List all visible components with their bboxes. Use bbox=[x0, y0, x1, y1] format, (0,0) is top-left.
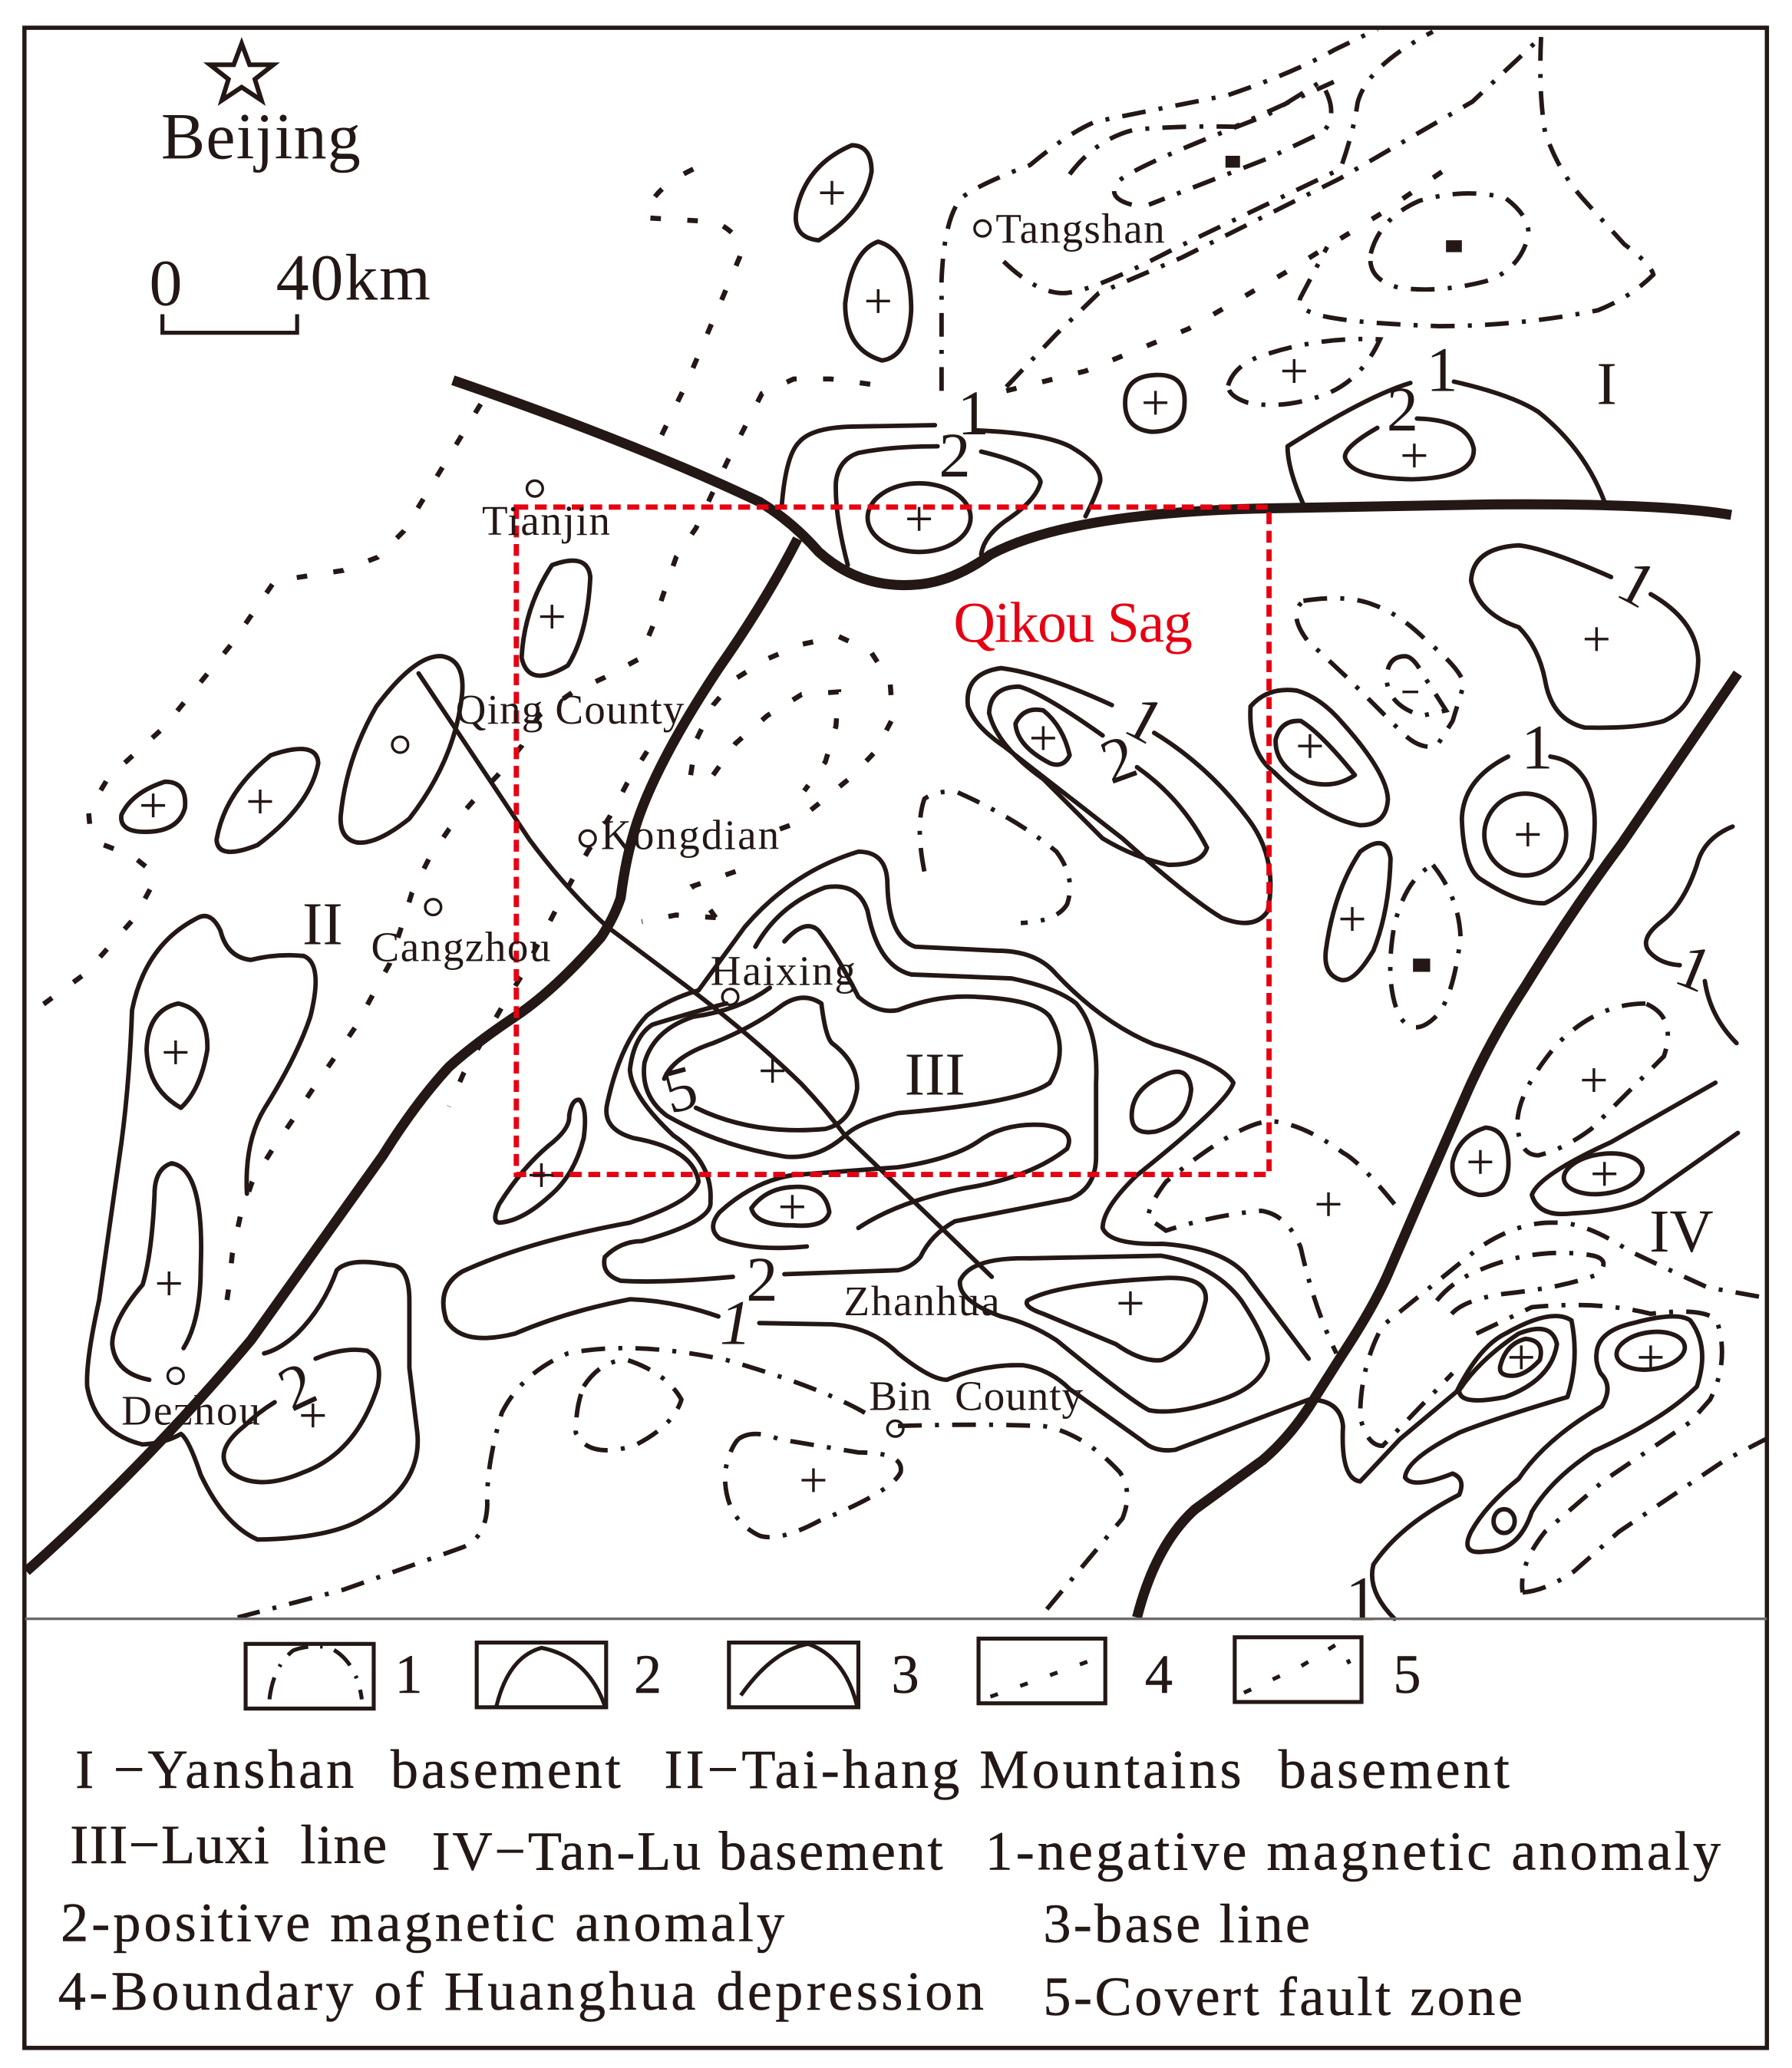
legend symbol 1: negative anomaly: 1 bbox=[394, 1644, 423, 1705]
legend symbol 3: base line bbox=[729, 1643, 919, 1707]
city labels: Tianjin bbox=[482, 497, 610, 544]
legend symbol 4: depression boundary: 4 bbox=[1145, 1644, 1173, 1705]
legend text lines: 5-Covert fault zone bbox=[1043, 1966, 1523, 2027]
city labels: Tangshan bbox=[995, 206, 1165, 252]
legend symbol 5: covert fault zone bbox=[1235, 1638, 1421, 1705]
contour value labels: 2 bbox=[268, 1347, 326, 1425]
contour value labels bbox=[268, 334, 1722, 1634]
anomaly markers: plus signs bbox=[141, 181, 1662, 1492]
contour value labels: 1 bbox=[1114, 681, 1176, 758]
anomaly markers: black squares and minus bbox=[1226, 156, 1462, 971]
legend text lines bbox=[58, 1739, 1721, 2027]
legend symbol 3: base line: 3 bbox=[891, 1644, 919, 1705]
scale bar: 0 bbox=[149, 246, 182, 319]
contour value labels: 1 bbox=[1345, 1563, 1378, 1634]
legend text lines: IV−Tan-Lu basement bbox=[432, 1821, 943, 1882]
legend text lines: I −Yanshan basement bbox=[75, 1739, 621, 1800]
legend symbol 4: depression boundary bbox=[979, 1638, 1173, 1705]
label: Qikou Sag: Qikou Sag bbox=[953, 591, 1193, 655]
label: Beijing: Beijing bbox=[161, 99, 361, 173]
legend text lines: 2-positive magnetic anomaly bbox=[61, 1892, 784, 1953]
panel: map bbox=[26, 29, 1766, 1634]
city labels bbox=[121, 206, 1165, 1434]
basement numerals: I bbox=[1596, 351, 1617, 418]
contour value labels: 1 bbox=[1521, 711, 1553, 782]
contour value labels: 2 bbox=[1387, 374, 1418, 444]
basement numerals bbox=[302, 351, 1714, 1265]
contour value labels: 1 bbox=[958, 378, 989, 448]
magnetic anomaly contours (solid lines) bbox=[87, 145, 1738, 1619]
contour value labels: 1 bbox=[1426, 334, 1458, 404]
base lines (dash-dot contours) bbox=[238, 29, 1766, 1618]
city labels: Zhanhua bbox=[844, 1278, 1000, 1324]
Qikou Sag study area (red dashed rectangle) bbox=[516, 507, 1269, 1175]
covert fault zones (dashed lines) bbox=[26, 169, 1442, 1326]
legend text lines: 3-base line bbox=[1043, 1893, 1310, 1954]
basement numerals: II bbox=[302, 890, 343, 958]
contour value labels: 1 bbox=[720, 1288, 751, 1358]
legend divider bbox=[25, 1618, 1767, 1620]
basement numerals: III bbox=[905, 1041, 965, 1108]
legend symbol 1: negative anomaly bbox=[246, 1644, 423, 1709]
city labels: Bin County bbox=[869, 1373, 1083, 1420]
city labels: Dezhou bbox=[121, 1387, 260, 1434]
contour value labels: 5 bbox=[655, 1050, 705, 1127]
contour value labels: 2 bbox=[746, 1244, 777, 1314]
legend text lines: 4-Boundary of Huanghua depression bbox=[58, 1961, 984, 2022]
legend symbol 2: positive anomaly bbox=[477, 1643, 662, 1707]
city labels: Haixing bbox=[711, 948, 856, 994]
contour value labels: 1 bbox=[1607, 545, 1668, 622]
basement numerals: IV bbox=[1649, 1198, 1714, 1265]
panel: legend bbox=[58, 1638, 1721, 2027]
city labels: Kongdian bbox=[601, 811, 779, 858]
legend text lines: 1-negative magnetic anomaly bbox=[985, 1821, 1721, 1882]
contour value labels: 2 bbox=[1091, 721, 1145, 797]
legend text lines: II−Tai-hang Mountains basement bbox=[665, 1739, 1510, 1800]
city labels: Qing County bbox=[456, 686, 685, 733]
boundary faults (thick lines) bbox=[26, 381, 1738, 1618]
scale bar: 40km bbox=[276, 241, 431, 315]
city labels: Cangzhou bbox=[371, 924, 551, 971]
city markers (circles) bbox=[168, 220, 991, 1436]
legend text lines: III−Luxi line bbox=[70, 1814, 387, 1875]
Luxi line (thin fault) bbox=[418, 674, 992, 1277]
scale bar bbox=[149, 241, 431, 333]
legend symbol 5: covert fault zone: 5 bbox=[1393, 1644, 1421, 1705]
contour value labels: 2 bbox=[939, 420, 971, 490]
icon: Beijing star bbox=[210, 44, 273, 101]
legend symbol 2: positive anomaly: 2 bbox=[634, 1644, 662, 1705]
contour value labels: 1 bbox=[1666, 928, 1722, 1006]
